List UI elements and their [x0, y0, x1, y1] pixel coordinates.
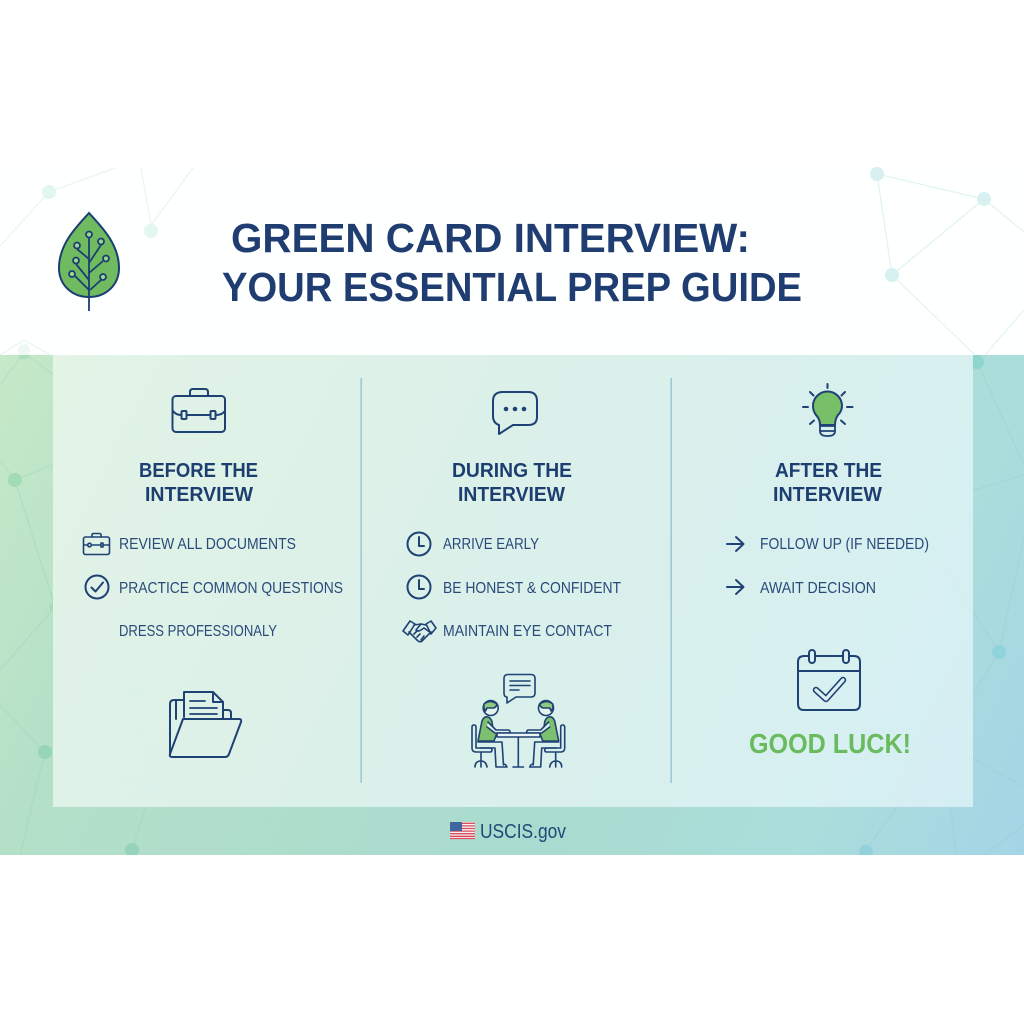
title: GREEN CARD INTERVIEW: [231, 215, 750, 261]
icon: folder with document [170, 692, 241, 757]
item: practice common questions: PRACTICE COMMON QUESTIONS [119, 580, 343, 597]
panel: after the interview [727, 384, 929, 759]
decorative network: top left [0, 168, 193, 356]
heading: before the interview: INTERVIEW [145, 483, 254, 506]
item: dress professionaly: DRESS PROFESSIONALY [119, 623, 277, 640]
panel: during the interview [403, 392, 621, 767]
heading: during the interview: DURING THE [452, 459, 572, 482]
icon: clock [408, 532, 430, 556]
icon: briefcase [172, 389, 225, 432]
item: be honest and confident: BE HONEST & CONFIDENT [443, 580, 621, 597]
good luck message: GOOD LUCK! [749, 728, 911, 759]
decorative network: band [0, 346, 1024, 859]
column divider 1 [360, 378, 362, 783]
decorative network: top right [870, 167, 1024, 355]
icon: arrow [727, 537, 744, 551]
heading: after the interview [773, 459, 883, 506]
source label: USCIS.gov [480, 821, 566, 843]
icon: US flag [450, 822, 475, 839]
icon: two people at a table [472, 674, 565, 767]
heading: after the interview: AFTER THE [775, 459, 882, 482]
icon: arrow [727, 580, 744, 594]
item: await decision: AWAIT DECISION [760, 580, 876, 597]
title [222, 215, 802, 310]
icon: calendar with check [798, 650, 860, 710]
heading: after the interview: INTERVIEW [773, 483, 883, 506]
icon: light bulb [803, 384, 852, 436]
item: review all documents: REVIEW ALL DOCUMENTS [119, 536, 296, 553]
item: arrive early: ARRIVE EARLY [443, 536, 539, 553]
icon: small briefcase [84, 534, 110, 554]
panel: before the interview [84, 389, 343, 757]
icon: clock [408, 576, 430, 598]
icon: check circle [86, 576, 108, 598]
content panel background [53, 355, 973, 807]
heading: before the interview [139, 459, 258, 506]
footer source [450, 821, 566, 843]
heading: before the interview: BEFORE THE [139, 459, 258, 482]
icon: leaf logo [59, 213, 119, 311]
heading: during the interview [452, 459, 572, 506]
column divider 2 [670, 378, 672, 783]
title: YOUR ESSENTIAL PREP GUIDE [222, 264, 802, 310]
item: maintain eye contact: MAINTAIN EYE CONTACT [443, 623, 612, 640]
infographic canvas [0, 167, 1024, 855]
item: follow up: FOLLOW UP (IF NEEDED) [760, 536, 929, 553]
icon: handshake [403, 621, 436, 642]
icon: speech bubble [493, 392, 537, 434]
heading: during the interview: INTERVIEW [458, 483, 566, 506]
background band [0, 355, 1024, 855]
